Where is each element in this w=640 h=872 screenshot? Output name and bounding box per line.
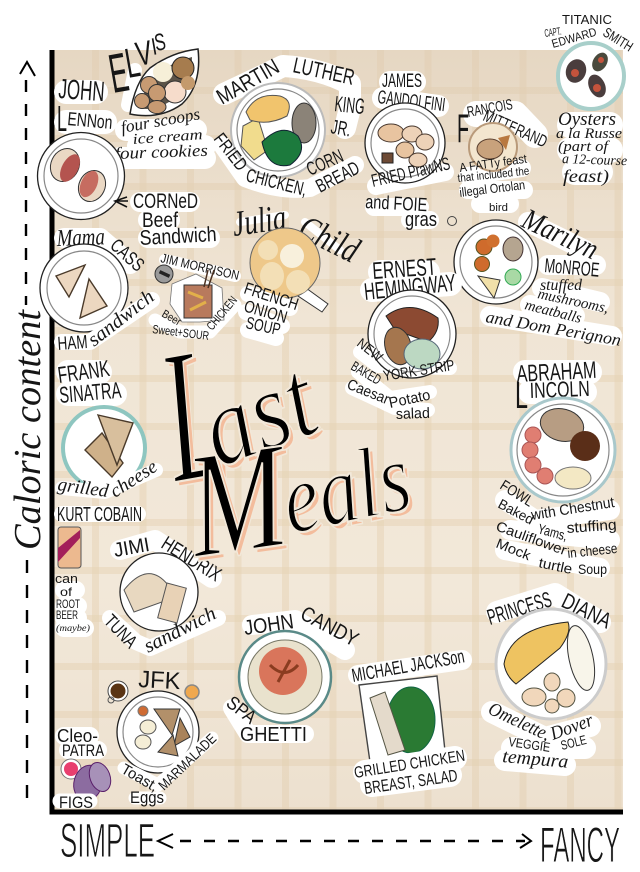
John Lennon: Beef: [142, 209, 178, 232]
plate: tuna sandwich: [120, 553, 198, 631]
Michael Jackson: [350, 646, 466, 798]
Titanic: Capt. Edward Smith: feast): [563, 166, 609, 187]
Elvis meal text: four scoops: [119, 104, 202, 137]
King meal text: CHICKEN,: [244, 165, 309, 201]
title word: Last: L: [145, 307, 238, 524]
plate: grilled cheese: [63, 407, 145, 489]
King name: KING: [333, 91, 366, 119]
Elvis: ice cream: [132, 127, 203, 148]
Marilyn Monroe: and Dom Perignon: [484, 307, 623, 350]
Titanic: Capt. Edward Smith: a 12-course: [562, 152, 627, 169]
Jackson name: MICHAEL JACKSon: [350, 646, 466, 687]
Monroe meal text: stuffed: [540, 277, 583, 294]
Lennon name: [57, 73, 113, 139]
plate: fried chicken and corn bread: [231, 83, 325, 177]
root beer text: can: [55, 571, 78, 586]
Mama Cass: CASS: [106, 235, 148, 276]
Titanic: Capt. Edward Smith: (part of: [558, 139, 610, 155]
Lincoln meal text: turtle: [537, 554, 574, 577]
King meal text: [210, 129, 363, 201]
icon: figs: [61, 759, 115, 804]
Julia Child: SOUP: [244, 313, 282, 339]
plate: fried prawns: [365, 103, 445, 183]
John Lennon: [38, 73, 217, 250]
Elvis name: I: [149, 33, 159, 61]
Princess Diana: tempura: [502, 746, 569, 773]
Mama Cass: sandwich: [84, 286, 159, 351]
spaghetti text: SPA: [222, 692, 260, 729]
plate: omelette, dover sole and veggie tempura: [496, 609, 606, 719]
James Gandolfini: GANDOLFINI: [376, 87, 446, 116]
JFK: Eggs: [130, 788, 164, 807]
title word: Last: ast: [184, 336, 334, 491]
Cleopatra name: Cleo-: [57, 726, 98, 746]
dish: French onion soup: [250, 228, 328, 312]
Lincoln meal text: Mock: [494, 535, 534, 564]
Lincoln meal text: Soup: [578, 561, 607, 577]
axis label: simple: SIMPLE: [60, 815, 155, 868]
Ernest Hemingway: HEMINGWAY: [363, 269, 457, 306]
Princess Diana: SOLE: [559, 732, 588, 753]
John Candy: GHETTI: [240, 724, 307, 746]
dish: ortolan bird: [469, 123, 517, 171]
Kurt Cobain: BEER: [56, 610, 78, 622]
title word: Meals: eals: [271, 420, 420, 556]
Lincoln meal text: Yams,: [536, 520, 569, 544]
icon: takeout box: [170, 270, 224, 322]
Diana meal text: Omelette,: [485, 698, 554, 745]
Elvis name: V: [133, 34, 155, 74]
Julia Child: [230, 197, 366, 339]
title word: Last: ast: [188, 340, 338, 495]
Monroe name: Marilyn: [516, 202, 603, 266]
Elvis name: [104, 28, 168, 105]
Hemingway meal text: YORK STRIP: [382, 357, 456, 385]
axis: caloric content arrow: [20, 62, 35, 805]
Francois Mitterand: illegal Ortolan: [459, 177, 526, 200]
Hemingway meal text: salad: [396, 405, 430, 423]
Lennon name: L: [57, 98, 67, 139]
title word: Meals: [176, 411, 424, 594]
Gandolfini name: JAMES: [382, 71, 422, 92]
French onion soup text: FRENCH: [242, 279, 301, 314]
John Candy: [222, 602, 362, 746]
Jim Morrison: [152, 250, 241, 343]
Candy name: JOHN: [242, 610, 295, 640]
plate: ham sandwich: [40, 244, 128, 332]
Elvis: four cookies: [114, 141, 208, 163]
JFK: MARMALADE: [155, 730, 219, 793]
Mitterand name: RANCOIS: [466, 96, 514, 121]
JFK meal text: Toast,: [118, 761, 161, 795]
Lincoln name: INCOLN: [529, 376, 590, 403]
chart axes: [52, 50, 623, 812]
JFK: [108, 666, 219, 807]
plate: toast, marmalade, eggs: [117, 691, 199, 773]
Smith name: TITANIC: [562, 12, 612, 27]
icon: root beer can: [58, 527, 81, 568]
Marilyn Monroe: MoNROE: [544, 255, 600, 282]
arrow to plate: [115, 197, 128, 207]
Francois Mitterand: that included the: [457, 166, 530, 185]
Frank Sinatra: [56, 355, 161, 502]
title word: Meals: M: [176, 411, 301, 590]
King meal text: FRIED: [210, 129, 251, 175]
Julia Child: ONION: [242, 297, 289, 327]
Hendrix name: JIMI: [112, 534, 151, 562]
icon: orange juice: [185, 685, 199, 699]
oysters text: Oysters: [558, 109, 616, 130]
Marilyn Monroe: meatballs: [523, 297, 583, 327]
Titanic: Capt. Edward Smith: a la Russe: [556, 126, 622, 142]
Hemingway meal text: [345, 335, 456, 423]
Kurt Cobain: [55, 504, 142, 633]
Kurt Cobain: of: [60, 585, 73, 599]
Jimi Hendrix: [99, 533, 225, 657]
title word: Meals: eals: [275, 424, 424, 560]
Child name: Julia: [230, 197, 289, 244]
Lincoln meal text: stuffing: [566, 517, 617, 537]
Abraham Lincoln: [494, 357, 618, 577]
Elvis name: E: [104, 41, 133, 105]
Hemingway meal text: Caesar: [345, 376, 392, 408]
grilled cheese text: grilled: [56, 474, 110, 502]
plate: fowl with chestnut stuffing: [511, 398, 615, 502]
plate: oysters: [558, 43, 624, 109]
plaid tablecloth panel: [53, 50, 623, 811]
Lennon name: JOHN: [58, 73, 106, 107]
Michael Jackson: BREAST, SALAD: [363, 766, 459, 798]
Smith name: [544, 12, 636, 55]
Princess Diana: DIANA: [558, 588, 616, 633]
Kurt Cobain: (maybe): [56, 623, 90, 633]
tuna sandwich text: TUNA: [99, 611, 141, 653]
Julia Child: Child: [292, 207, 366, 271]
Francois Mitterand: bird: [489, 202, 508, 214]
Marilyn Monroe: [454, 202, 623, 350]
beer text: Beer: [160, 308, 183, 329]
Lincoln meal text: FOWL: [497, 477, 536, 510]
title word: Last: L: [149, 311, 242, 528]
Martin Luther King Jr.: [210, 52, 366, 201]
Lincoln meal text: in cheese: [567, 540, 618, 561]
Kurt Cobain: ROOT: [56, 599, 80, 611]
Lincoln meal text: with Chestnut: [529, 494, 616, 524]
figs text: FIGS: [59, 793, 93, 812]
Diana name: PRINCESS: [484, 587, 555, 630]
Lincoln name: L: [515, 375, 528, 417]
Hemingway name: ERNEST: [372, 254, 437, 285]
axis: simple to fancy arrow: [158, 834, 531, 848]
James Gandolfini: gras: [405, 209, 437, 231]
Hemingway meal text: Potato: [387, 387, 432, 412]
Lincoln name: ABRAHAM: [516, 357, 597, 388]
icon: coffee cup: [108, 681, 128, 703]
title word: Meals: M: [180, 415, 305, 594]
Cleopatra: PATRA: [62, 741, 105, 760]
Jackson meal text: GRILLED CHICKEN: [353, 748, 466, 782]
small ring decoration: [448, 216, 456, 226]
Lincoln meal text: Cauliflower: [494, 518, 569, 558]
Elvis name: S: [152, 28, 168, 57]
plate: grilled chicken breast and salad: [359, 676, 445, 762]
icon: pill disc: [155, 265, 173, 283]
Mitterand name: MITTERAND: [480, 106, 550, 151]
James Gandolfini: [365, 71, 452, 231]
Lennon name: ENNon: [67, 109, 113, 134]
Gandolfini meal text: FRIED PrawNS: [369, 153, 452, 191]
King meal text: CORN: [303, 146, 347, 181]
King name: LUTHER: [291, 52, 357, 90]
Marilyn Monroe: mushrooms,: [536, 286, 610, 317]
John Candy: CANDY: [297, 602, 362, 652]
Elvis name: L: [121, 38, 143, 87]
Frank Sinatra: cheese: [106, 456, 161, 502]
Francois Mitterand: [457, 96, 550, 214]
Mitterand name: [457, 96, 550, 151]
Hemingway meal text: NEW: [354, 335, 387, 365]
Lincoln name: [515, 357, 597, 417]
Jimi Hendrix: sandwich: [140, 602, 220, 657]
Mitterand meal text: A FATTy feast: [458, 152, 528, 175]
James Gandolfini: and FOIE: [365, 192, 428, 216]
Lincoln meal text: Baked: [496, 496, 537, 527]
John Lennon: Sandwich: [139, 223, 217, 250]
King name: JR.: [329, 116, 353, 141]
Princess Diana: VEGGIE: [508, 734, 552, 755]
Titanic: Capt. Edward Smith: [544, 12, 636, 187]
plate: corned beef sandwich: [38, 132, 124, 220]
Cass name: Mama: [56, 224, 105, 252]
King name: [212, 52, 366, 141]
Smith name: EDWARD: [550, 25, 598, 51]
sweet and sour text: Sweet+SOUR: [152, 322, 210, 343]
plate: steak and baked potato: [368, 290, 456, 378]
Frank Sinatra: SINATRA: [58, 377, 123, 408]
Cleopatra: [57, 726, 115, 812]
plate: stuffed mushrooms and meatballs: [454, 220, 538, 304]
Elvis: [104, 28, 208, 163]
JFK name: JFK: [138, 666, 181, 695]
axis label: caloric content: Caloric content: [7, 309, 49, 550]
Lincoln meal text: [494, 477, 618, 577]
chicken text: CHICKEN: [204, 293, 240, 333]
icon: ice cream and cookies dish: [130, 49, 199, 116]
main title: Last Meals: [145, 307, 424, 594]
Mitterand name: F: [457, 107, 469, 151]
plate: spaghetti: [239, 631, 331, 723]
King name: MARTIN: [212, 54, 283, 109]
Sinatra name: FRANK: [56, 355, 112, 388]
Ernest Hemingway: [345, 254, 457, 423]
corned beef text: CORNeD: [133, 190, 198, 213]
Princess Diana: [484, 587, 616, 773]
Jimi Hendrix: HENDRIX: [157, 533, 225, 586]
Smith name: CAPT.: [544, 26, 562, 40]
Princess Diana: Dover: [547, 710, 597, 745]
King meal text: BREAD: [313, 158, 363, 197]
Cobain name: KURT COBAIN: [57, 504, 142, 526]
ham sandwich text: HAM: [57, 332, 88, 355]
Hemingway meal text: BAKED: [348, 358, 384, 388]
Morrison name: JIM MORRISON: [159, 250, 241, 283]
Mama Cass: [40, 224, 159, 355]
